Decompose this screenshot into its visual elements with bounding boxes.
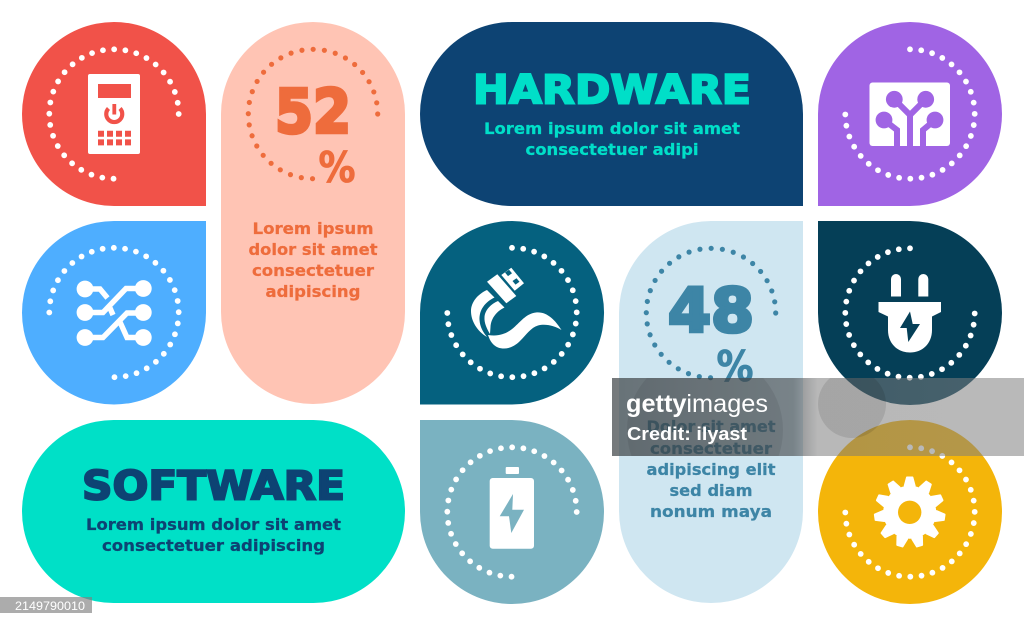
panel: plug drop <box>818 221 1002 405</box>
description text: Dolor sit amet <box>646 417 776 436</box>
description text: nonum maya <box>650 502 772 521</box>
dotted ring <box>845 447 975 577</box>
panel: chip drop <box>818 22 1002 206</box>
dotted ring <box>845 49 975 179</box>
grey-blue drop shape <box>420 420 604 604</box>
image id tag <box>0 597 92 613</box>
dotted ring <box>248 49 378 179</box>
icon: electric plug <box>878 274 941 352</box>
hardware description: consectetuer adipi <box>526 140 698 159</box>
description text: consectetuer <box>650 439 772 458</box>
red drop shape <box>22 22 206 206</box>
panel: software <box>22 420 405 603</box>
number 52: 52 <box>275 76 351 148</box>
number 48: 48 <box>668 276 754 346</box>
panel: hardware <box>420 22 803 206</box>
credit text: Credit: ilyast <box>627 424 747 444</box>
software description: Lorem ipsum dolor sit amet <box>86 515 341 534</box>
description text: sed diam <box>670 481 752 500</box>
panel: 48 percent <box>619 221 803 603</box>
peach pill <box>221 22 405 404</box>
description text <box>248 219 378 301</box>
icon: crossing circuit lines <box>77 280 152 346</box>
dotted ring <box>845 248 975 378</box>
hardware description: Lorem ipsum dolor sit amet <box>484 119 740 138</box>
turquoise pill <box>22 420 405 603</box>
percent sign: % <box>318 143 356 192</box>
description text: adipiscing <box>266 282 360 301</box>
dotted ring <box>447 447 577 577</box>
gold circle <box>818 420 1002 604</box>
watermark overlay shapes <box>627 378 886 456</box>
hardware description <box>484 119 740 159</box>
light blue pill <box>619 221 803 603</box>
getty images logo text: gettyimages <box>626 390 768 418</box>
panel: circuit drop <box>22 221 206 404</box>
description text: consectetuer <box>252 261 374 280</box>
panel: usb drop <box>420 221 604 404</box>
software description <box>86 515 341 555</box>
icon: usb cable <box>471 268 562 349</box>
icon: circuit chip <box>870 82 950 146</box>
icon: gear <box>875 478 945 547</box>
heading: hardware: HARDWARE <box>473 68 751 114</box>
software description: consectetuer adipiscing <box>102 536 325 555</box>
panel: remote control drop <box>22 22 206 206</box>
description text: dolor sit amet <box>248 240 378 259</box>
panel: battery drop <box>420 420 604 604</box>
tag background <box>0 597 92 613</box>
navy banner <box>420 22 803 206</box>
dotted ring <box>49 248 179 377</box>
translucent grey strip <box>612 378 1024 456</box>
dark teal drop shape <box>818 221 1002 405</box>
dotted ring <box>646 248 776 378</box>
watermark band <box>612 378 1024 456</box>
description text: Lorem ipsum <box>252 219 374 238</box>
image id number: 2149790010 <box>15 599 85 613</box>
panel: 52 percent <box>221 22 405 404</box>
icon: battery <box>490 467 534 549</box>
panel: gear circle <box>818 420 1002 604</box>
dotted ring <box>49 49 179 179</box>
blue drop shape <box>22 221 206 404</box>
teal drop shape <box>420 221 604 404</box>
icon: remote control <box>88 74 140 154</box>
dotted ring <box>447 248 577 377</box>
percent sign: % <box>716 342 754 391</box>
heading: software: SOFTWARE <box>82 464 345 510</box>
purple drop shape <box>818 22 1002 206</box>
description text: adipiscing elit <box>646 460 776 479</box>
description text <box>646 417 776 521</box>
